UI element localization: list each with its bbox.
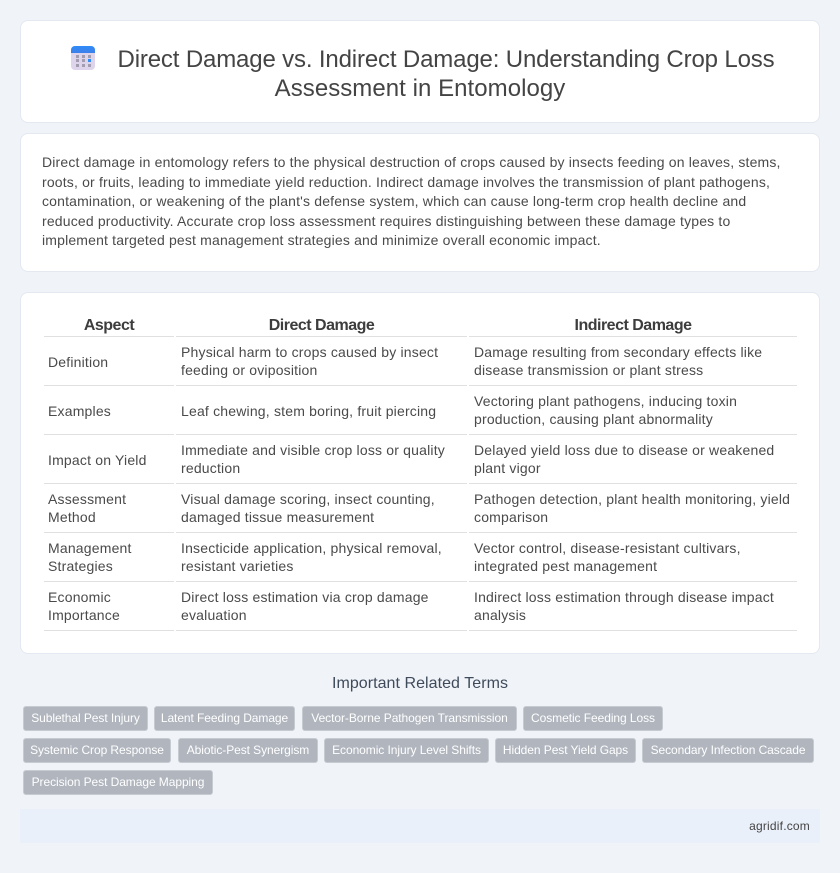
tag: Sublethal Pest Injury <box>31 711 140 725</box>
row: economic importance: evaluation <box>181 607 247 623</box>
comparison table panel <box>20 292 820 654</box>
tag <box>154 706 295 731</box>
row: management strategies: Insecticide application, physical removal, <box>181 540 442 556</box>
row: assessment method: Visual damage scoring, insect counting, <box>181 491 435 507</box>
row: examples: Leaf chewing, stem boring, fruit piercing <box>181 403 436 419</box>
row: definition: Damage resulting from secondary effects like <box>474 344 762 360</box>
tag: Latent Feeding Damage <box>161 711 288 725</box>
row: assessment method: Pathogen detection, plant health monitoring, yield <box>474 491 790 507</box>
row: economic importance: Importance <box>48 607 120 623</box>
table header: Aspect <box>84 317 134 334</box>
row: examples <box>48 393 737 427</box>
tag: Secondary Infection Cascade <box>651 743 805 757</box>
row: impact on yield: reduction <box>181 460 240 476</box>
table header <box>84 317 692 334</box>
intro paragraph: contamination, or weakening of the plant's defense system, which can cause long-term crop health decline and <box>42 193 746 209</box>
row: examples: Examples <box>48 403 111 419</box>
title: Direct Damage vs. Indirect Damage: Understanding Crop Loss <box>118 46 774 73</box>
row: management strategies: Management <box>48 540 132 556</box>
related terms tags <box>23 706 814 795</box>
row: assessment method: Method <box>48 509 96 525</box>
intro text panel <box>20 133 820 272</box>
title <box>118 46 774 102</box>
tag <box>324 738 489 763</box>
row: impact on yield: Impact on Yield <box>48 452 147 468</box>
tag <box>23 706 148 731</box>
row: economic importance: Direct loss estimation via crop damage <box>181 589 429 605</box>
row: economic importance: analysis <box>474 607 526 623</box>
intro paragraph <box>42 154 781 248</box>
row: assessment method <box>48 491 790 525</box>
row: impact on yield: Immediate and visible crop loss or quality <box>181 442 445 458</box>
row: assessment method: comparison <box>474 509 548 525</box>
row: management strategies: integrated pest management <box>474 558 657 574</box>
row: management strategies <box>48 540 741 574</box>
row: examples: Vectoring plant pathogens, inducing toxin <box>474 393 737 409</box>
row: examples: production, causing plant abnormality <box>474 411 713 427</box>
title card <box>20 20 820 123</box>
row: definition: Definition <box>48 354 108 370</box>
row: management strategies: resistant varieties <box>181 558 294 574</box>
row: assessment method: Assessment <box>48 491 126 507</box>
tag: Vector-Borne Pathogen Transmission <box>311 711 508 725</box>
table header: Indirect Damage <box>574 317 691 334</box>
table header: Direct Damage <box>269 317 374 334</box>
row: economic importance <box>48 589 774 623</box>
tag <box>178 738 318 763</box>
row: management strategies: Strategies <box>48 558 113 574</box>
intro paragraph: reduced productivity. Accurate crop loss assessment requires distinguishing between these damage types to <box>42 213 730 229</box>
footer bar <box>20 809 820 843</box>
intro paragraph: Direct damage in entomology refers to the physical destruction of crops caused by insects feeding on leaves, stems, <box>42 154 781 170</box>
tag <box>23 738 171 763</box>
tag: Precision Pest Damage Mapping <box>32 775 204 789</box>
row: impact on yield: plant vigor <box>474 460 541 476</box>
tag: Hidden Pest Yield Gaps <box>503 743 628 757</box>
row: impact on yield <box>48 442 774 476</box>
tag <box>495 738 636 763</box>
row: assessment method: damaged tissue measurement <box>181 509 374 525</box>
source: agridif.com <box>749 819 810 833</box>
row: economic importance: Economic <box>48 589 111 605</box>
tag: Economic Injury Level Shifts <box>332 743 481 757</box>
tag <box>302 706 517 731</box>
tag: Abiotic-Pest Synergism <box>187 743 309 757</box>
row: management strategies: Vector control, disease-resistant cultivars, <box>474 540 741 556</box>
tag <box>523 706 663 731</box>
intro paragraph: roots, or fruits, leading to immediate yield reduction. Indirect damage involves the transmission of plant pathogens, <box>42 174 770 190</box>
tag: Cosmetic Feeding Loss <box>531 711 655 725</box>
tag: Systemic Crop Response <box>30 743 164 757</box>
row: definition: Physical harm to crops caused by insect <box>181 344 438 360</box>
row: economic importance: Indirect loss estimation through disease impact <box>474 589 774 605</box>
row: definition <box>48 344 762 378</box>
row: impact on yield: Delayed yield loss due to disease or weakened <box>474 442 774 458</box>
intro paragraph: implement targeted pest management strategies and minimize overall economic impact. <box>42 232 601 248</box>
tag <box>642 738 814 763</box>
related terms heading: Important Related Terms <box>332 675 508 692</box>
icon: calendar <box>71 46 95 70</box>
row: definition: disease transmission or plant stress <box>474 362 703 378</box>
row: definition: feeding or oviposition <box>181 362 318 378</box>
tag <box>23 770 213 795</box>
title: Assessment in Entomology <box>275 75 565 102</box>
